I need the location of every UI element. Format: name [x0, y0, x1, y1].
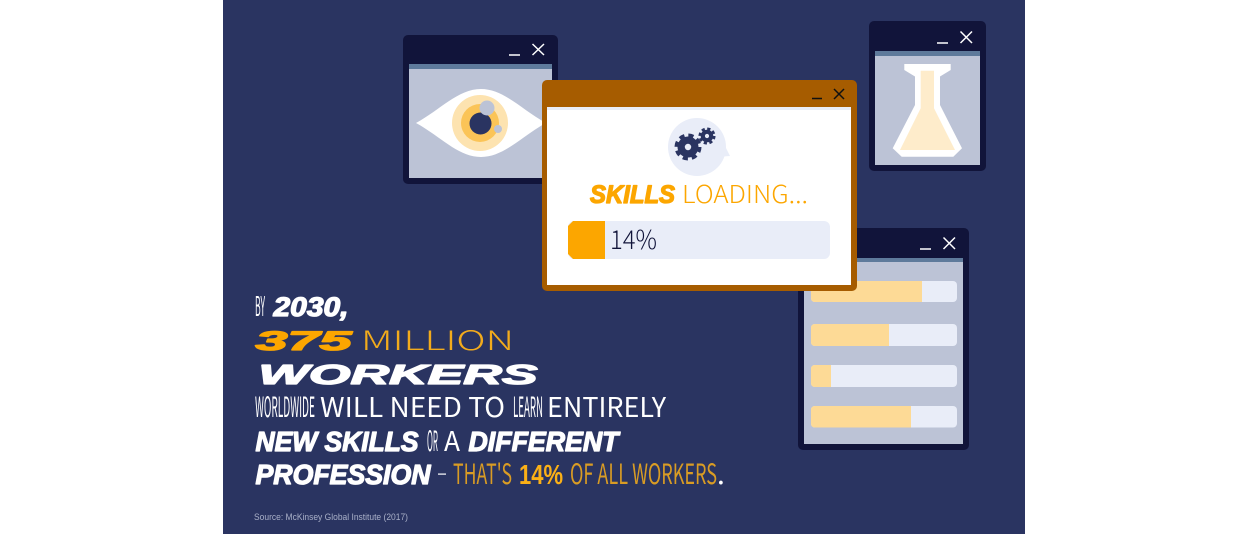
line: new skills or a different: OR — [427, 420, 438, 460]
main window: skills loading — [542, 80, 857, 291]
line: profession, that's 14% of all workers: THAT'S — [453, 453, 512, 493]
bar 4 — [811, 406, 957, 428]
source note: Source: McKinsey Global Institute (2017) — [254, 512, 408, 523]
line: profession, that's 14% of all workers: . — [717, 453, 725, 493]
line: worldwide will need to learn entirely — [255, 386, 667, 426]
background panel — [223, 0, 1025, 534]
line: new skills or a different: A — [444, 420, 461, 459]
progress bar: 14% — [568, 220, 830, 259]
line: by 2030 — [255, 285, 348, 324]
bar 1 — [811, 281, 957, 302]
line: profession, that's 14% of all workers — [256, 453, 725, 493]
heading: skills loading: LOADING... — [682, 175, 808, 211]
heading: skills loading — [590, 175, 808, 211]
icon: flask — [893, 64, 962, 157]
line: new skills or a different: DIFFERENT — [468, 426, 621, 457]
bar 2 — [811, 324, 957, 346]
line: profession, that's 14% of all workers: 14% — [519, 459, 563, 490]
line: 375 million: 375 — [256, 326, 354, 356]
window: progress bars — [798, 228, 969, 450]
line: by 2030: 2030, — [272, 292, 348, 322]
icon: minimize and close — [920, 238, 955, 249]
window: flask — [869, 21, 986, 171]
line: worldwide will need to learn entirely: ENTIRELY — [547, 386, 667, 425]
icon: gears — [668, 118, 730, 176]
line: profession, that's 14% of all workers: PROFESSION — [256, 459, 431, 490]
main statement text — [255, 285, 725, 493]
icon: minimize and close — [812, 89, 844, 99]
icon: minimize and close — [937, 32, 972, 43]
icon: minimize and close — [509, 44, 544, 55]
line: new skills or a different — [256, 420, 621, 460]
line: 375 million: MILLION — [361, 319, 514, 358]
line: worldwide will need to learn entirely: WILL NEED TO — [320, 386, 505, 425]
line: by 2030: BY — [255, 285, 265, 324]
window: eye — [403, 35, 558, 184]
bar 3 — [811, 365, 957, 387]
line: new skills or a different: NEW SKILLS — [256, 426, 419, 457]
line: worldwide will need to learn entirely: WORLDWIDE — [255, 386, 315, 426]
line: 375 million — [256, 319, 514, 358]
progress bar: 14%: 14% — [610, 220, 657, 257]
line: profession, that's 14% of all workers: OF ALL WORKERS — [570, 453, 717, 493]
heading: skills loading: SKILLS — [590, 181, 675, 209]
line: worldwide will need to learn entirely: LEARN — [513, 386, 543, 426]
line: workers: WORKERS — [258, 359, 538, 390]
icon: eye — [416, 89, 546, 157]
